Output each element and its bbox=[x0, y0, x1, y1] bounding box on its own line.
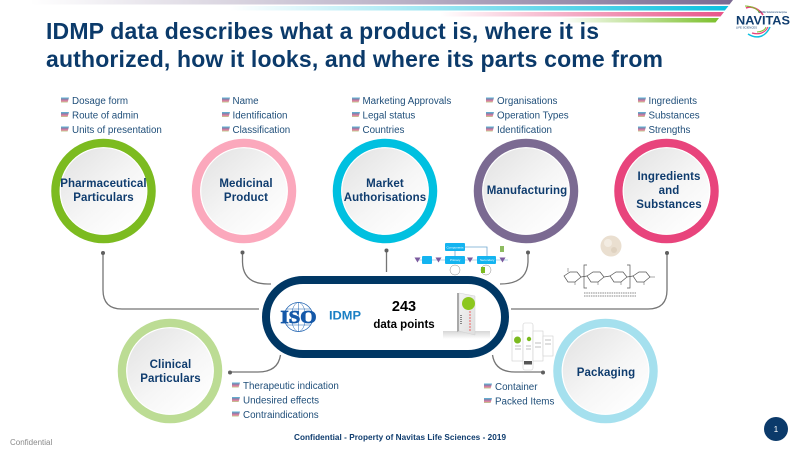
bullets: Packaging bbox=[484, 382, 554, 408]
circle: Ingredients and Substances: Substances bbox=[636, 199, 702, 211]
circle: Manufacturing bbox=[478, 143, 574, 239]
circle: Clinical Particulars: Particulars bbox=[140, 373, 201, 385]
confidential label: Confidential bbox=[10, 438, 52, 447]
bullets: Packaging: Packed Items bbox=[495, 396, 554, 408]
title: IDMP data describes what a product is, where it is bbox=[46, 18, 599, 44]
bullets: Pharmaceutical Particulars: Units of presentation bbox=[72, 125, 162, 136]
ISO logo bbox=[280, 302, 316, 332]
page number: 1 bbox=[774, 425, 779, 434]
bullets: Manufacturing: Operation Types bbox=[497, 110, 569, 122]
bullets: Ingredients and Substances bbox=[638, 96, 700, 136]
product box bbox=[443, 293, 490, 339]
circle: Packaging bbox=[558, 323, 654, 419]
bullets: Clinical Particulars: Undesired effects bbox=[243, 396, 319, 406]
circle: Pharmaceutical Particulars bbox=[56, 143, 152, 239]
bullets: Medicinal Product: Classification bbox=[232, 125, 290, 136]
circle: Manufacturing: Manufacturing bbox=[487, 185, 567, 197]
packaging dieline bbox=[512, 323, 553, 370]
data points bbox=[373, 299, 435, 331]
bullets: Pharmaceutical Particulars: Dosage form bbox=[72, 96, 128, 107]
logo: Navitas Life Sciences: A TAKE Solutions Enterprise bbox=[758, 11, 788, 14]
bullets: Medicinal Product bbox=[222, 96, 290, 136]
logo: Navitas Life Sciences: LIFE SCIENCES bbox=[736, 26, 757, 30]
circle: Ingredients and Substances: Ingredients bbox=[637, 171, 701, 183]
circle: Pharmaceutical Particulars: Particulars bbox=[73, 192, 134, 204]
logo: Navitas Life Sciences: NAVITAS bbox=[736, 14, 790, 28]
circle: Market Authorisations bbox=[337, 143, 433, 239]
circle: Ingredients and Substances bbox=[618, 143, 714, 239]
bullets: Ingredients and Substances: Substances bbox=[648, 110, 700, 122]
bullets: Market Authorisations bbox=[352, 96, 451, 136]
circle: Clinical Particulars bbox=[122, 323, 218, 419]
header ribbons bbox=[30, 0, 733, 22]
bullets: Manufacturing: Identification bbox=[497, 125, 552, 136]
bullets: Clinical Particulars: Contraindications bbox=[243, 410, 319, 421]
central IDMP pill bbox=[266, 280, 505, 354]
data points: data points bbox=[373, 319, 435, 331]
IDMP label: IDMP bbox=[329, 308, 361, 322]
manufacturing flow diagram bbox=[414, 243, 508, 275]
bullets: Market Authorisations: Legal status bbox=[362, 110, 415, 122]
powder image bbox=[600, 236, 622, 256]
logo: Navitas Life Sciences bbox=[736, 6, 790, 37]
data points: 243 bbox=[392, 299, 416, 315]
title bbox=[46, 18, 663, 72]
bullets: Ingredients and Substances: Ingredients bbox=[648, 96, 697, 107]
circle: Pharmaceutical Particulars: Pharmaceutical bbox=[60, 178, 147, 190]
bullets: Manufacturing bbox=[486, 96, 569, 136]
circle: Medicinal Product: Medicinal bbox=[219, 178, 273, 190]
circle: Ingredients and Substances: and bbox=[659, 185, 679, 197]
footer: Confidential - Property of Navitas Life Sciences - 2019 bbox=[294, 433, 506, 442]
title: authorized, how it looks, and where its parts come from bbox=[46, 46, 663, 72]
circle: Medicinal Product: Product bbox=[224, 192, 268, 204]
chemical structure bbox=[564, 265, 655, 296]
bullets: Packaging: Container bbox=[495, 382, 538, 393]
page number bbox=[764, 417, 788, 441]
circle: Clinical Particulars: Clinical bbox=[150, 359, 191, 371]
bullets: Manufacturing: Organisations bbox=[497, 96, 558, 107]
manufacturing flow diagram: Components bbox=[446, 246, 464, 250]
circle: Market Authorisations: Authorisations bbox=[344, 192, 426, 204]
bullets: Ingredients and Substances: Strengths bbox=[648, 125, 691, 136]
bullets: Pharmaceutical Particulars bbox=[61, 96, 162, 136]
circle: Market Authorisations: Market bbox=[366, 178, 404, 190]
bullets: Pharmaceutical Particulars: Route of admin bbox=[72, 110, 138, 122]
ISO logo: ISO bbox=[280, 307, 316, 327]
manufacturing flow diagram: Primary bbox=[450, 258, 461, 262]
connectors bbox=[101, 248, 669, 374]
bullets: Medicinal Product: Name bbox=[232, 96, 259, 107]
bullets: Market Authorisations: Marketing Approvals bbox=[362, 96, 451, 107]
manufacturing flow diagram: Secondary bbox=[480, 258, 495, 262]
bullets: Market Authorisations: Countries bbox=[362, 125, 405, 136]
bullets: Clinical Particulars: Therapeutic indication bbox=[243, 381, 339, 392]
circle: Packaging: Packaging bbox=[577, 367, 635, 379]
bullets: Medicinal Product: Identification bbox=[232, 110, 288, 122]
circle: Medicinal Product bbox=[196, 143, 292, 239]
bullets: Clinical Particulars bbox=[232, 381, 339, 421]
